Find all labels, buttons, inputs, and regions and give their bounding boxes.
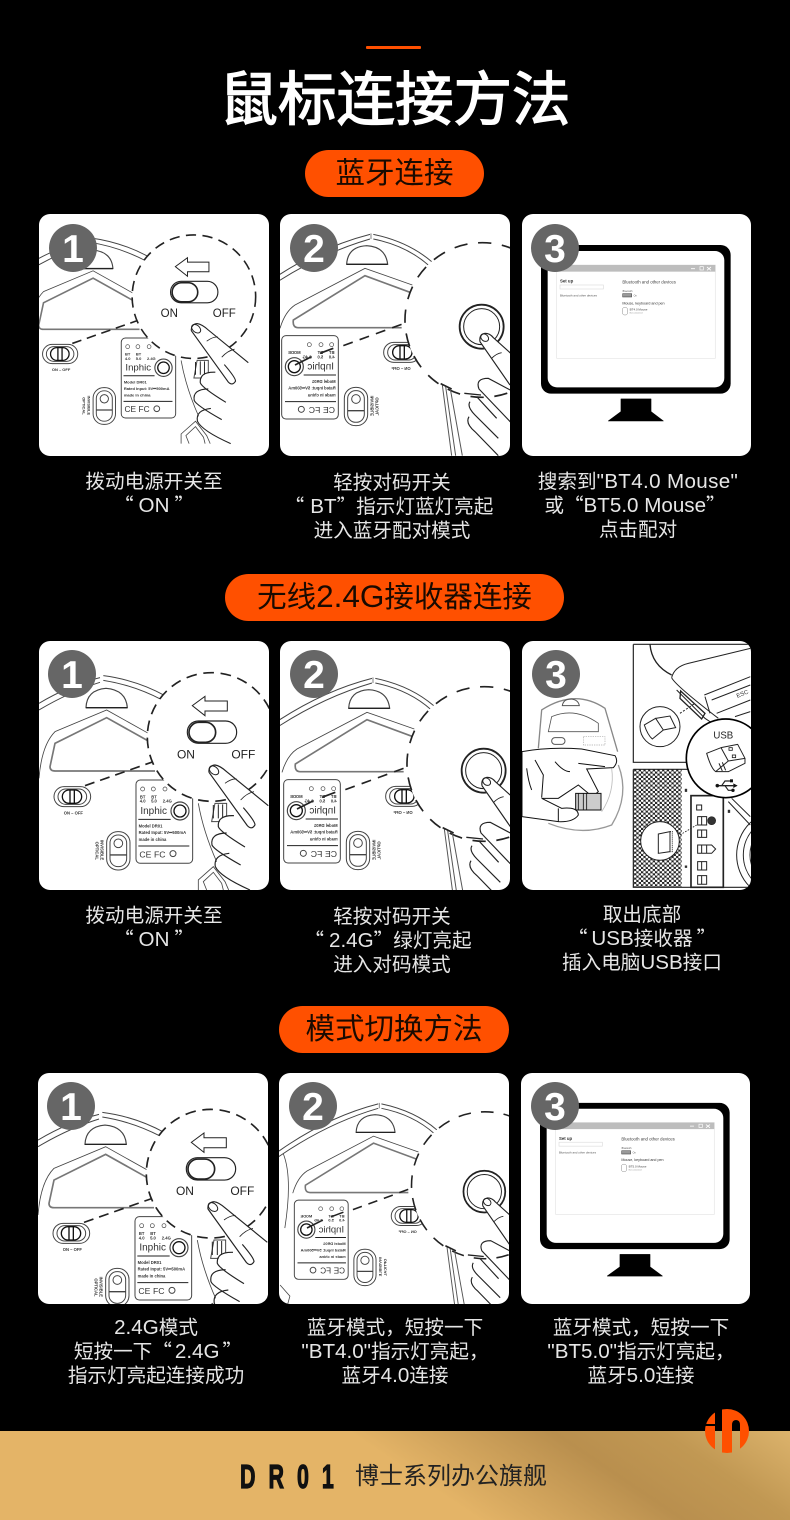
illustration: pairing button: INVISIBLE	[378, 1257, 383, 1277]
illustration: power switch: ON	[177, 747, 195, 761]
step badge 3	[532, 650, 580, 698]
illustration: monitor settings: Not connected	[629, 1168, 641, 1171]
illustration: pairing button: Rated Input: 5V⎓500mA	[301, 1247, 346, 1252]
series text: 博士系列办公旗舰	[355, 1463, 547, 1490]
caption: 2.4G step 2: “2.4G”绿灯亮起	[304, 924, 472, 953]
illustration: pairing button: Model DR01	[311, 379, 336, 384]
panel: bluetooth step 3	[522, 214, 751, 456]
caption: 2.4G step 3: 取出底部	[603, 904, 681, 926]
illustration: power switch: 2.4G	[162, 1235, 171, 1240]
panel: 2.4G step 3	[522, 641, 751, 890]
illustration: pairing button: ON – OFF	[391, 366, 411, 371]
caption: mode step 3: "BT5.0"指示灯亮起，	[547, 1340, 735, 1363]
illustration: pairing button: CE	[323, 405, 335, 415]
illustration: power switch: OPTICAL	[82, 397, 87, 415]
heading: bluetooth connection	[305, 150, 484, 197]
illustration: pairing button: 4.0	[338, 1218, 345, 1223]
illustration: power switch: 4.0	[139, 1235, 145, 1240]
step badge 2	[290, 650, 338, 698]
illustration: power switch: OPTICAL	[94, 1278, 99, 1297]
caption: mode step 1	[68, 1316, 244, 1387]
illustration: power switch: CE	[138, 1286, 151, 1296]
illustration: pairing button: Inphic	[309, 806, 336, 817]
step badge 1	[47, 1082, 95, 1130]
step badge 3: 3	[545, 654, 567, 697]
illustration: power switch: Model DR01	[124, 379, 147, 384]
panel: mode step 3	[521, 1073, 750, 1304]
illustration: pairing button: Inphic	[307, 362, 334, 373]
illustration: power switch: INVISIBLE	[100, 840, 105, 861]
heading: mode switching	[279, 1006, 509, 1053]
caption: bluetooth step 3	[538, 470, 738, 541]
title: 鼠标连接方法	[219, 68, 570, 133]
step badge 1	[48, 650, 96, 698]
illustration: power switch: Inphic	[139, 1243, 166, 1254]
caption: bluetooth step 2: “ BT”指示灯蓝灯亮起	[285, 490, 493, 519]
illustration: pairing button: ON – OFF	[393, 810, 413, 815]
illustration: power switch: 2.4G	[163, 799, 172, 804]
illustration: power switch: Model DR01	[138, 1260, 162, 1265]
illustration: pairing button: 5.0	[319, 798, 325, 803]
illustration: monitor settings: Mouse, keyboard and pen	[621, 1158, 664, 1162]
illustration: monitor settings	[541, 245, 731, 421]
step badge 1: 1	[62, 228, 84, 271]
illustration: pairing button: Rated Input: 5V⎓500mA	[288, 386, 336, 391]
caption: mode step 3: 蓝牙5.0连接	[587, 1364, 694, 1387]
step badge 2: 2	[302, 1086, 324, 1129]
caption: 2.4G step 2	[304, 906, 472, 976]
step badge 1: 1	[60, 1086, 82, 1129]
illustration: USB receiver: USB	[713, 730, 733, 741]
step badge 1	[49, 224, 97, 272]
illustration: pairing button: MODE	[288, 350, 301, 355]
illustration: power switch: 4.0	[125, 356, 131, 361]
caption: 2.4G step 1: “ON ”	[114, 923, 194, 952]
illustration: pairing button: Inphic	[318, 1224, 344, 1235]
illustration: power switch	[38, 1109, 292, 1327]
illustration: monitor settings: Not connected	[630, 312, 642, 315]
panel: 2.4G step 1	[39, 641, 269, 890]
illustration: pairing button: FC	[320, 1267, 331, 1276]
caption: 2.4G step 3: 插入电脑USB接口	[562, 951, 722, 974]
caption: mode step 2: 蓝牙4.0连接	[341, 1364, 448, 1387]
illustration: power switch: Rated Input: 5V⎓500mA	[138, 1267, 185, 1272]
illustration: pairing button: BT	[330, 794, 336, 799]
illustration: pairing button: CE	[333, 1267, 345, 1276]
illustration: power switch: OFF	[231, 747, 255, 761]
illustration: power switch: FC	[153, 1286, 165, 1296]
USB callout	[686, 719, 765, 798]
illustration: pairing button: Rated Input: 5V⎓500mA	[290, 830, 338, 835]
caption: bluetooth step 1: 拨动电源开关至	[85, 471, 223, 493]
caption: bluetooth step 3: 点击配对	[599, 519, 677, 541]
illustration: monitor settings: Mouse, keyboard and pen	[622, 301, 665, 305]
illustration: power switch: 5.0	[151, 799, 158, 804]
caption: 2.4G step 3	[562, 904, 722, 974]
caption: mode step 1: 2.4G模式	[114, 1316, 198, 1339]
illustration: power switch: Inphic	[140, 806, 167, 817]
caption: 2.4G step 2: 轻按对码开关	[333, 906, 451, 928]
illustration: power switch: FC	[154, 849, 166, 859]
illustration: power switch: BT	[151, 794, 157, 799]
step badge 3	[531, 1082, 579, 1130]
illustration: pairing button: Model DR01	[322, 1241, 346, 1246]
step badge 2: 2	[303, 654, 325, 697]
illustration: pairing button: ON – OFF	[398, 1229, 417, 1234]
step badge 2	[290, 224, 338, 272]
illustration: pairing button: made in china	[307, 393, 336, 398]
illustration: pairing button: BT	[339, 1214, 344, 1219]
caption: 2.4G step 2: 进入对码模式	[333, 954, 451, 976]
caption: 2.4G step 1	[85, 905, 223, 952]
caption: bluetooth step 2	[285, 472, 493, 542]
illustration: monitor settings: BT5.0 Mouse	[629, 1165, 647, 1168]
illustration: monitor settings: Bluetooth and other devices	[621, 1137, 675, 1142]
illustration: monitor settings: Bluetooth and other devices	[559, 1150, 597, 1154]
illustration: power switch: BT	[125, 352, 131, 357]
illustration: pairing button: BT	[317, 350, 323, 355]
illustration: power switch: CE	[124, 404, 136, 414]
illustration: monitor settings: BT4.0 Mouse	[630, 308, 648, 312]
illustration: power switch: 4.0	[140, 799, 146, 804]
illustration: power switch: INVISIBLE	[86, 396, 91, 415]
illustration: power switch: ON	[176, 1184, 194, 1198]
illustration: pairing button: MODE	[290, 794, 303, 799]
panel: 2.4G step 2	[280, 641, 510, 890]
caption: mode step 2	[301, 1317, 489, 1387]
step badge 3: 3	[544, 228, 566, 271]
illustration: power switch: Inphic	[125, 363, 151, 374]
heading: mode switching: 模式切换方法	[305, 1013, 482, 1046]
logo: in mark	[705, 1409, 749, 1453]
step badge 3: 3	[544, 1086, 566, 1129]
panel: mode step 2	[279, 1073, 509, 1304]
illustration: pairing button	[264, 677, 562, 900]
footer band	[0, 1431, 790, 1520]
illustration: pairing button: MODE	[300, 1214, 312, 1219]
illustration: pairing button: made in china	[309, 837, 338, 842]
illustration: power switch: Model DR01	[139, 823, 163, 828]
illustration: pairing button: 4.0	[330, 798, 337, 803]
heading: wireless 2.4G connection: 无线2.4G接收器连接	[257, 578, 532, 614]
illustration: monitor settings: Bluetooth and other devices	[560, 293, 598, 297]
accent bar	[366, 46, 421, 49]
illustration: pairing button: 5.0	[328, 1218, 334, 1223]
step badge 2	[289, 1082, 337, 1130]
heading: bluetooth connection: 蓝牙连接	[335, 157, 454, 190]
illustration: pairing button: BT	[328, 350, 334, 355]
caption: 2.4G step 3: “USB接收器”	[568, 922, 716, 951]
illustration: power switch: ON – OFF	[52, 367, 71, 372]
illustration: power switch: Rated Input: 5V⎓500mA	[139, 830, 186, 835]
illustration: power switch: 2.4G	[147, 356, 156, 361]
illustration: power switch: CE	[139, 849, 152, 859]
caption: mode step 1: 指示灯亮起连接成功	[68, 1365, 244, 1387]
illustration: power switch	[28, 235, 272, 444]
caption: bluetooth step 1: “ON ”	[114, 489, 194, 518]
illustration: pairing button: BT	[319, 794, 325, 799]
caption: bluetooth step 3: 或“BT5.0 Mouse”	[544, 489, 726, 518]
illustration: power switch	[39, 673, 293, 890]
illustration: pairing button: Model DR01	[313, 823, 338, 828]
caption: mode step 3: 蓝牙模式，短按一下	[553, 1317, 729, 1339]
illustration: pairing button: 2.4G	[304, 798, 314, 803]
illustration: power switch: OFF	[213, 308, 236, 320]
caption: mode step 2: "BT4.0"指示灯亮起，	[301, 1340, 489, 1363]
illustration: power switch: Rated Input: 5V⎓500mA	[124, 386, 170, 391]
PC tower panel	[633, 769, 790, 900]
illustration: pairing button	[275, 1103, 558, 1314]
illustration: pairing button	[262, 233, 560, 456]
illustration: power switch: made in china	[124, 393, 151, 398]
caption: mode step 1: 短按一下“2.4G”	[74, 1335, 242, 1364]
illustration: monitor settings: On	[633, 1152, 636, 1154]
illustration: pairing button: OPTICAL	[375, 397, 380, 416]
illustration: monitor settings: Bluetooth and other devices	[622, 279, 676, 284]
illustration: monitor settings: Set up	[560, 279, 574, 284]
illustration: pairing button: 4.0	[328, 354, 335, 359]
illustration: pairing button: 5.0	[317, 354, 323, 359]
illustration: power switch: made in china	[138, 1274, 166, 1279]
illustration: power switch: 5.0	[136, 356, 142, 361]
illustration: monitor settings: On	[634, 295, 637, 297]
illustration: power switch: 5.0	[150, 1235, 157, 1240]
illustration: power switch: ON	[161, 308, 178, 320]
illustration: pairing button: OPTICAL	[377, 841, 382, 860]
illustration: pairing button: OPTICAL	[382, 1259, 387, 1277]
illustration: pairing button: CE	[325, 849, 337, 859]
illustration: power switch: BT	[136, 352, 142, 357]
laptop panel	[633, 644, 750, 762]
caption: bluetooth step 2: 进入蓝牙配对模式	[314, 520, 470, 542]
illustration: monitor settings: Bluetooth	[623, 290, 633, 293]
illustration: power switch: BT	[150, 1231, 156, 1236]
illustration: USB receiver	[522, 644, 790, 900]
step badge 1: 1	[61, 654, 83, 697]
illustration: monitor settings: Set up	[559, 1136, 573, 1141]
caption: bluetooth step 1	[85, 471, 223, 518]
illustration: power switch: BT	[139, 1231, 145, 1236]
caption: bluetooth step 2: 轻按对码开关	[333, 472, 451, 494]
step badge 3	[531, 224, 579, 272]
model name: DR01	[240, 1458, 347, 1495]
heading: wireless 2.4G connection	[225, 574, 564, 621]
illustration: pairing button: INVISIBLE	[370, 396, 375, 416]
step badge 2: 2	[303, 228, 325, 271]
illustration: pairing button: FC	[311, 849, 322, 859]
illustration: pairing button: BT	[328, 1214, 334, 1219]
illustration: pairing button: made in china	[319, 1254, 346, 1259]
illustration: pairing button: INVISIBLE	[372, 840, 377, 860]
illustration: power switch: OPTICAL	[95, 842, 100, 860]
illustration: power switch: ON – OFF	[64, 810, 83, 815]
illustration: monitor settings	[540, 1103, 730, 1276]
caption: 2.4G step 1: 拨动电源开关至	[85, 905, 223, 927]
caption: mode step 3	[547, 1317, 735, 1387]
illustration: monitor settings: Bluetooth	[622, 1147, 632, 1150]
illustration: pairing button: FC	[309, 405, 320, 415]
panel: mode step 1	[38, 1073, 268, 1304]
illustration: power switch: BT	[140, 794, 146, 799]
illustration: power switch: ON – OFF	[63, 1247, 82, 1252]
panel: bluetooth step 2	[280, 214, 510, 456]
caption: bluetooth step 3: 搜索到"BT4.0 Mouse"	[538, 470, 738, 493]
caption: mode step 2: 蓝牙模式，短按一下	[307, 1317, 483, 1339]
illustration: power switch: FC	[139, 404, 150, 414]
illustration: power switch: made in china	[139, 837, 167, 842]
illustration: power switch: OFF	[230, 1184, 254, 1198]
illustration: pairing button: 2.4G	[314, 1218, 323, 1223]
illustration: USB receiver: ESC	[736, 689, 750, 700]
panel: bluetooth step 1	[39, 214, 269, 456]
illustration: pairing button: 2.4G	[302, 354, 312, 359]
illustration: power switch: INVISIBLE	[99, 1277, 104, 1297]
mouse and hand	[522, 699, 623, 830]
